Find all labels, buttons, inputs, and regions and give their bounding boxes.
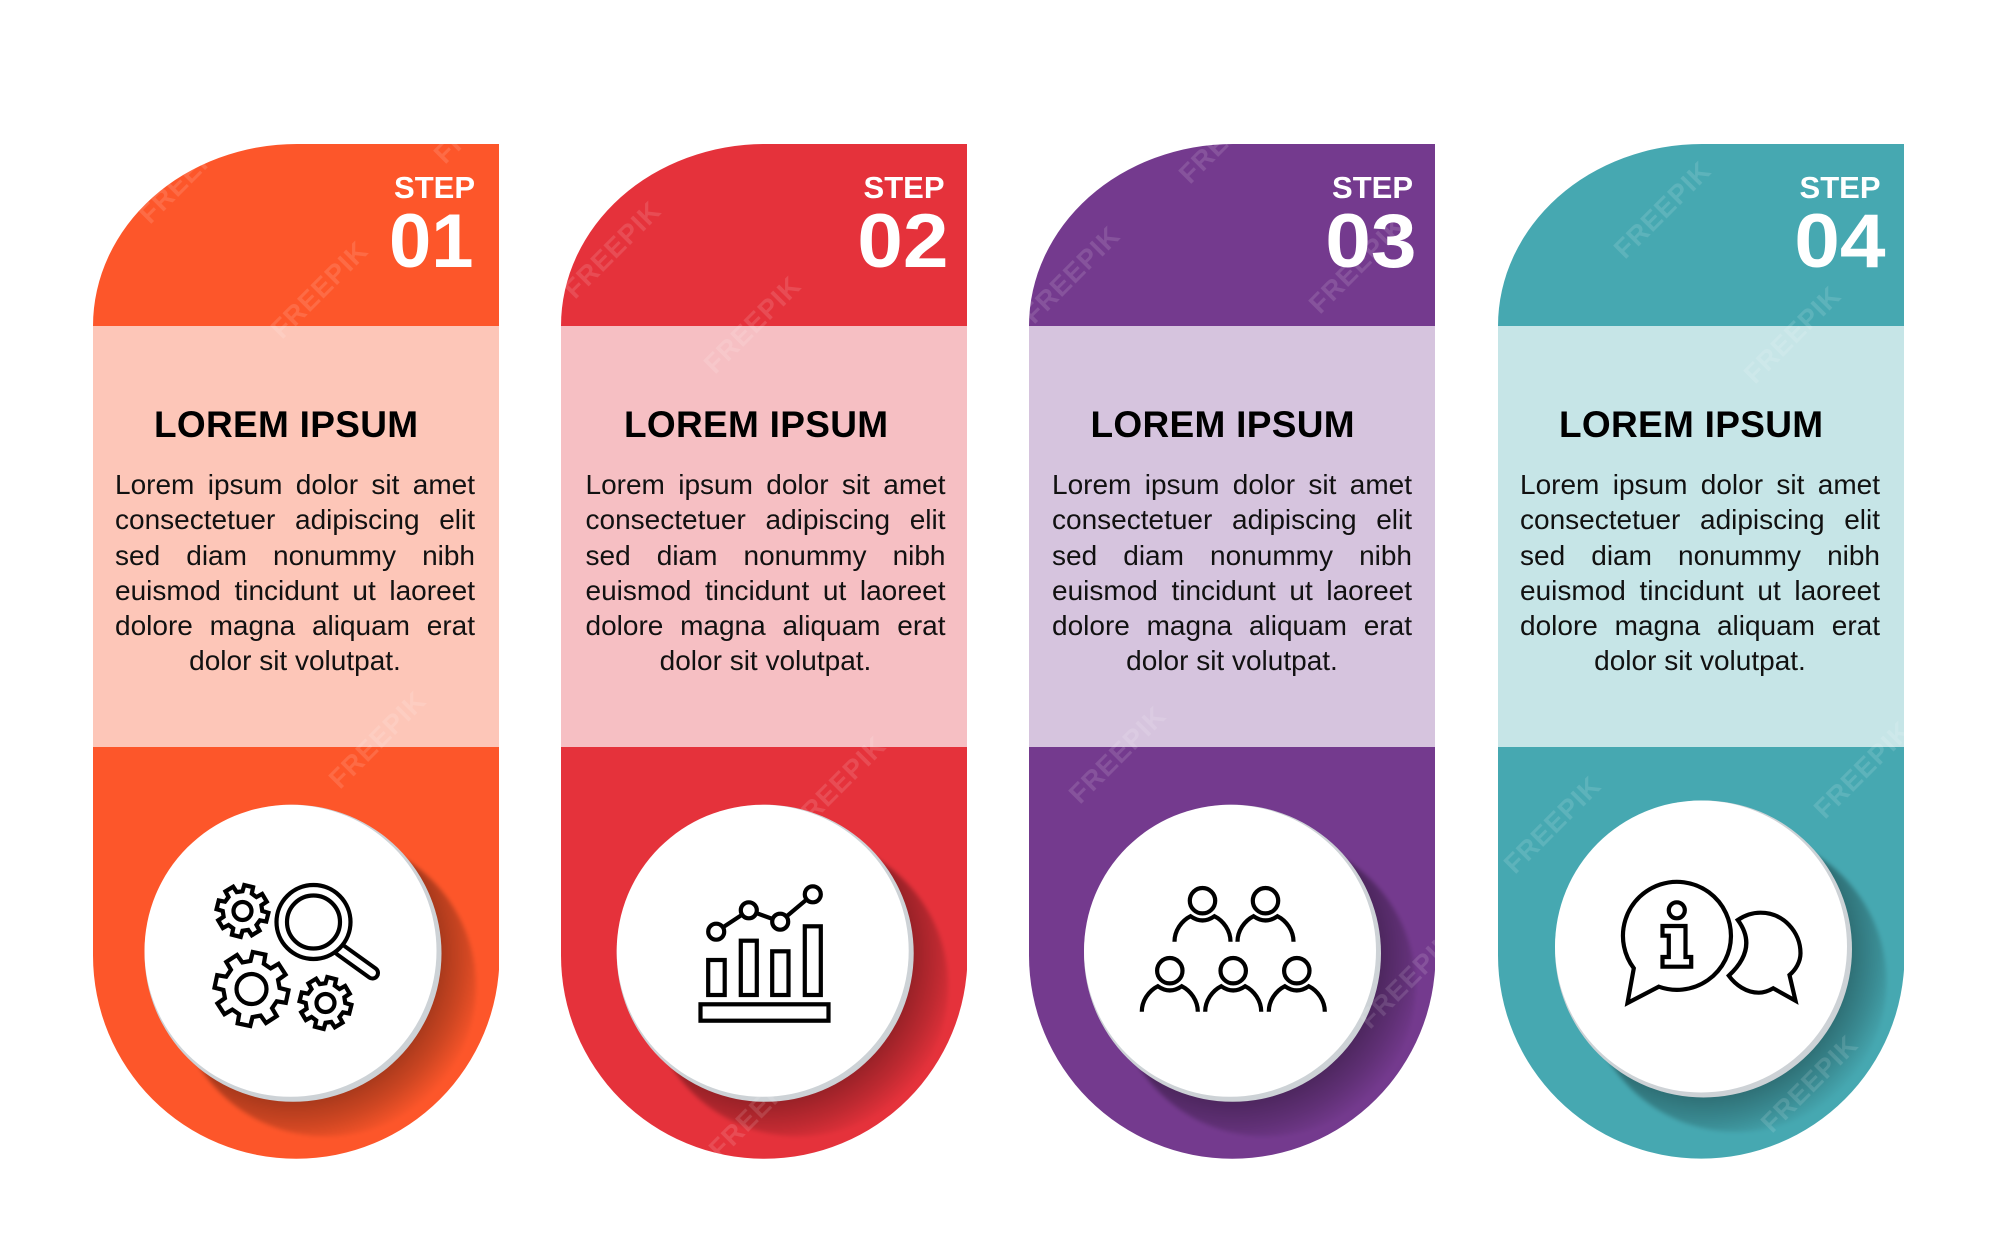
watermarks: FREEPIK (1738, 280, 1847, 389)
watermarks: FREEPIK (323, 685, 432, 794)
body text: dolore magna aliquam erat (1520, 610, 1880, 641)
watermarks: FREEPIK (1063, 700, 1172, 809)
card shape: orange (92, 144, 499, 1159)
card shape: red (560, 144, 967, 1159)
heading: LOREM IPSUM (154, 404, 418, 445)
step 01 artwork (93, 144, 499, 1159)
body text: Lorem ipsum dolor sit amet (1520, 469, 1880, 500)
body text: sed diam nonummy nibh (115, 540, 475, 571)
heading: LOREM IPSUM (624, 404, 888, 445)
heading: LOREM IPSUM (1090, 404, 1355, 445)
icon: group of people (1141, 888, 1324, 1012)
body text: euismod tincidunt ut laoreet (1052, 575, 1412, 606)
body text (586, 469, 946, 676)
watermarks: FREEPIK (1755, 1029, 1864, 1138)
light text band (1498, 326, 1904, 747)
heading: LOREM IPSUM (1559, 404, 1823, 445)
body text: dolor sit volutpat. (189, 645, 401, 676)
light text band (92, 326, 499, 747)
body text: euismod tincidunt ut laoreet (1520, 575, 1880, 606)
body text: consectetuer adipiscing elit (1052, 504, 1412, 535)
body text (115, 469, 475, 676)
circle shadow (1608, 853, 1886, 1132)
body text: dolore magna aliquam erat (1052, 610, 1412, 641)
body text: euismod tincidunt ut laoreet (586, 575, 946, 606)
body text: Lorem ipsum dolor sit amet (586, 469, 946, 500)
panel: step 03 (1029, 144, 1435, 1159)
white circle badge (144, 805, 441, 1102)
watermarks: FREEPIK (428, 60, 537, 169)
step label: STEP (1800, 170, 1880, 205)
step label: STEP (1332, 170, 1413, 205)
step number: 02 (857, 199, 948, 284)
body text: consectetuer adipiscing elit (1520, 504, 1880, 535)
watermarks: FREEPIK (265, 235, 374, 344)
white circle badge (616, 805, 913, 1102)
body text: dolor sit volutpat. (1126, 645, 1338, 676)
watermarks: FREEPIK (1353, 925, 1462, 1034)
watermarks: FREEPIK (703, 1055, 812, 1164)
step number: 03 (1326, 199, 1417, 284)
step label: STEP (864, 170, 944, 205)
body text: sed diam nonummy nibh (1052, 540, 1412, 571)
panel: step 02 (561, 144, 967, 1159)
body text: consectetuer adipiscing elit (115, 504, 475, 535)
card shape: purple (1028, 144, 1435, 1159)
step 04 artwork (1498, 144, 1904, 1159)
body text: dolore magna aliquam erat (115, 610, 475, 641)
body text: dolor sit volutpat. (1594, 645, 1806, 676)
light text band (1028, 326, 1435, 747)
body text: euismod tincidunt ut laoreet (115, 575, 475, 606)
icon: bar chart with trend line (700, 886, 828, 1021)
watermarks: FREEPIK (1303, 210, 1412, 319)
white circle badge (1554, 800, 1852, 1098)
card shape: teal (1498, 144, 1904, 1159)
white circle badge (1084, 805, 1380, 1102)
step 02 artwork (561, 144, 967, 1159)
watermarks: FREEPIK (1498, 770, 1607, 879)
body text: sed diam nonummy nibh (586, 540, 946, 571)
icon: gears and magnifier (208, 880, 372, 1034)
light text band (560, 326, 967, 747)
body text: Lorem ipsum dolor sit amet (115, 469, 475, 500)
icon: info speech bubbles (1622, 882, 1800, 1003)
watermarks: FREEPIK (1608, 155, 1717, 264)
circle shadow (196, 856, 477, 1137)
watermarks: FREEPIK (698, 270, 807, 379)
panel: step 01 (93, 144, 499, 1159)
panel: step 04 (1498, 144, 1904, 1159)
watermarks: FREEPIK (133, 120, 242, 229)
circle shadow (1138, 858, 1415, 1136)
watermarks: FREEPIK (1017, 220, 1126, 329)
body text (1052, 469, 1412, 676)
watermarks: FREEPIK (783, 730, 892, 839)
body text (1520, 469, 1880, 676)
body text: dolore magna aliquam erat (586, 610, 946, 641)
step number: 01 (389, 199, 474, 284)
watermarks: FREEPIK (1808, 715, 1917, 824)
watermarks: FREEPIK (558, 195, 667, 304)
step label: STEP (394, 170, 475, 205)
watermarks: FREEPIK (1173, 80, 1282, 189)
step number: 04 (1794, 199, 1886, 284)
circle shadow (668, 856, 949, 1137)
body text: consectetuer adipiscing elit (586, 504, 946, 535)
body text: dolor sit volutpat. (660, 645, 871, 676)
body text: sed diam nonummy nibh (1520, 540, 1880, 571)
body text: Lorem ipsum dolor sit amet (1052, 469, 1412, 500)
step 03 artwork (1029, 144, 1435, 1159)
